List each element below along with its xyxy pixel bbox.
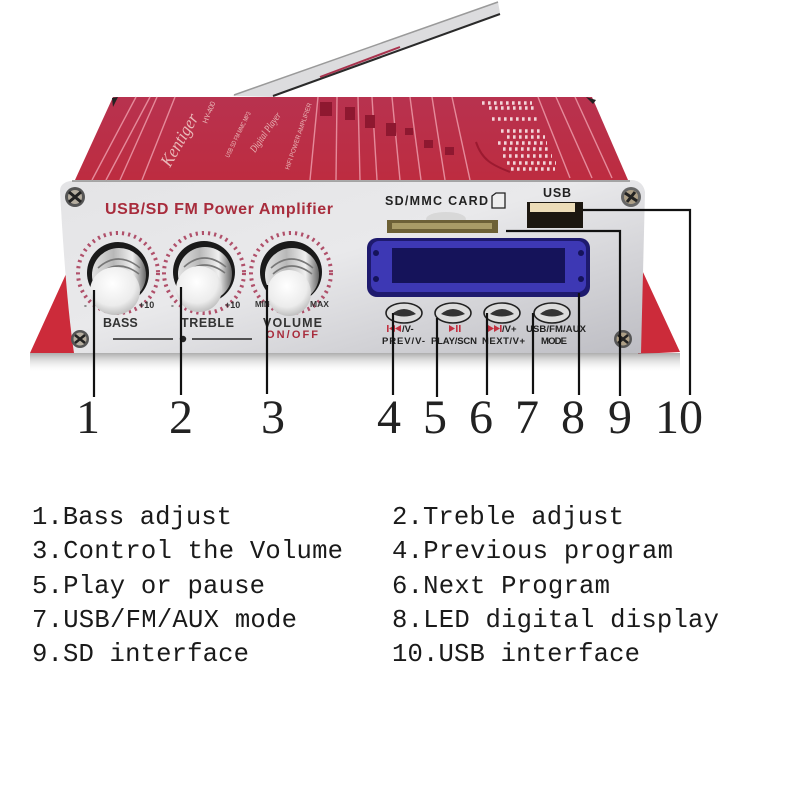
LED display	[367, 238, 590, 297]
knob: treble	[164, 233, 244, 330]
vent dot grid	[482, 103, 556, 169]
button: prev	[382, 303, 425, 347]
top script: Digital Player	[248, 110, 284, 155]
legend list: 8.LED digital display	[392, 606, 719, 635]
callout numbers: 9	[608, 391, 632, 444]
screw bottom left	[71, 330, 89, 348]
knob: bass: -	[84, 300, 87, 310]
callout numbers	[76, 391, 703, 444]
callout numbers: 7	[515, 391, 539, 444]
button: next: /V+	[502, 324, 517, 335]
legend list: 4.Previous program	[392, 537, 673, 566]
button: mode: MODE	[541, 336, 567, 347]
button: next	[482, 303, 525, 347]
button: prev: PREV/V-	[382, 336, 425, 347]
right mounting foot	[638, 270, 680, 354]
antenna	[232, 2, 500, 97]
label: USB: USB	[543, 186, 571, 200]
button: play: PLAY/SCN	[431, 336, 477, 347]
legend list	[32, 503, 719, 669]
legend list: 6.Next Program	[392, 572, 610, 601]
knob: treble: TREBLE	[181, 316, 234, 330]
button: play	[431, 303, 477, 347]
legend list: 1.Bass adjust	[32, 503, 232, 532]
knob: volume: MAX	[310, 299, 329, 309]
callout numbers: 4	[377, 391, 401, 444]
label: SD/MMC CARD: SD/MMC CARD	[385, 194, 488, 208]
amplifier top heat sink	[75, 97, 628, 180]
knob: bass	[78, 233, 158, 330]
callout numbers: 10	[655, 391, 703, 444]
USB port	[527, 202, 583, 228]
legend list: 9.SD interface	[32, 640, 249, 669]
legend list: 5.Play or pause	[32, 572, 265, 601]
shadow under unit	[30, 353, 680, 373]
SD card slot	[387, 212, 498, 233]
front panel	[60, 180, 645, 353]
callout numbers: 8	[561, 391, 585, 444]
callout numbers: 6	[469, 391, 493, 444]
knob: treble: +10	[225, 300, 240, 310]
model number: HY-400	[201, 100, 217, 125]
leader lines	[94, 210, 690, 397]
knob: treble: -	[171, 300, 174, 310]
callout numbers: 5	[423, 391, 447, 444]
brand lettering: Kentiger	[156, 109, 203, 171]
button: prev: /V-	[402, 324, 414, 335]
legend list: 7.USB/FM/AUX mode	[32, 606, 297, 635]
callout numbers: 1	[76, 391, 100, 444]
knob: bass: +10	[139, 300, 154, 310]
panel heading: USB/SD FM Power Amplifier	[105, 201, 333, 218]
knob: volume: VOLUME	[263, 316, 322, 330]
callout numbers: 2	[169, 391, 193, 444]
screw top left	[65, 187, 85, 207]
legend list: 2.Treble adjust	[392, 503, 624, 532]
screw bottom right	[614, 330, 632, 348]
legend list: 10.USB interface	[392, 640, 640, 669]
divider with dot	[113, 336, 252, 342]
top caption: HIFI POWER AMPLIFIER	[284, 102, 314, 171]
button: mode: USB/FM/AUX	[526, 324, 587, 335]
callout numbers: 3	[261, 391, 285, 444]
knob: volume: ON/OFF	[266, 329, 318, 341]
button: mode	[526, 303, 587, 347]
left mounting foot	[30, 274, 76, 353]
legend list: 3.Control the Volume	[32, 537, 343, 566]
screw top right	[621, 187, 641, 207]
knob: bass: BASS	[103, 316, 138, 330]
button: next: NEXT/V+	[482, 336, 525, 347]
top text: USB SD FM MMC MP3	[225, 111, 253, 159]
knob: volume: MIN	[255, 300, 270, 309]
knob: volume	[251, 233, 331, 341]
